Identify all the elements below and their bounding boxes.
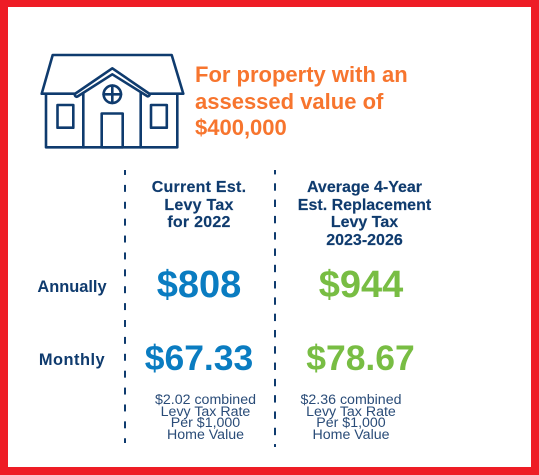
row label: annually: Annually bbox=[37, 278, 107, 296]
divider: left dashed line bbox=[124, 170, 126, 443]
note: replacement rate: Levy Tax Rate bbox=[306, 404, 396, 420]
note: replacement rate: Home Value bbox=[312, 427, 390, 443]
column heading: replacement levy: Levy Tax bbox=[331, 214, 398, 231]
heading: property value bbox=[195, 62, 408, 140]
value: current monthly: $67.33 bbox=[145, 338, 253, 378]
note: current rate: $2.02 combined bbox=[155, 392, 256, 408]
note: current rate bbox=[155, 392, 256, 443]
column heading: replacement levy: Average 4-Year bbox=[307, 179, 422, 196]
column heading: current levy: for 2022 bbox=[167, 214, 231, 231]
heading: property value: For property with an bbox=[195, 62, 408, 87]
column heading: current levy bbox=[152, 179, 246, 231]
heading: property value: assessed value of bbox=[195, 88, 383, 114]
column heading: current levy: Current Est. bbox=[152, 179, 246, 196]
heading: property value: $400,000 bbox=[195, 115, 287, 140]
column heading: replacement levy: 2023-2026 bbox=[326, 232, 403, 248]
value: replacement monthly: $78.67 bbox=[306, 338, 415, 378]
divider: right dashed line bbox=[274, 170, 276, 447]
column heading: replacement levy: Est. Replacement bbox=[298, 196, 431, 214]
note: replacement rate: $2.36 combined bbox=[301, 392, 401, 408]
note: replacement rate: Per $1,000 bbox=[316, 415, 386, 431]
value: current annual: $808 bbox=[157, 264, 241, 306]
column heading: replacement levy bbox=[298, 179, 432, 248]
column heading: current levy: Levy Tax bbox=[164, 196, 234, 214]
note: current rate: Levy Tax Rate bbox=[161, 404, 250, 420]
note: current rate: Home Value bbox=[167, 427, 244, 443]
note: replacement rate bbox=[300, 392, 401, 443]
row label: monthly: Monthly bbox=[39, 351, 105, 369]
note: current rate: Per $1,000 bbox=[171, 415, 240, 431]
value: replacement annual: $944 bbox=[319, 264, 403, 306]
